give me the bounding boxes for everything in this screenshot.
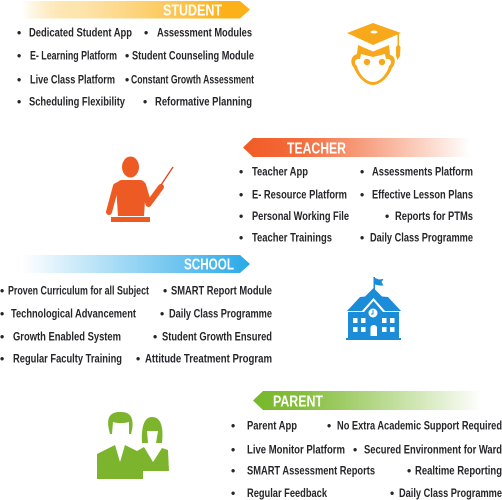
student list: • xyxy=(125,72,129,86)
parent list: Live Monitor Platform xyxy=(247,442,345,456)
parent list xyxy=(231,418,502,500)
parent list: • xyxy=(231,486,235,500)
panel: parent xyxy=(97,391,502,500)
school list: Regular Faculty Training xyxy=(13,352,122,366)
student list: • xyxy=(143,94,147,108)
teacher list: • xyxy=(239,188,243,202)
panel: teacher xyxy=(109,138,473,244)
parent list: Parent App xyxy=(247,418,297,432)
student list: Reformative Planning xyxy=(155,94,252,108)
school banner: SCHOOL xyxy=(184,256,234,274)
student list: • xyxy=(17,94,21,108)
parent list: • xyxy=(231,442,235,456)
student list: Assessment Modules xyxy=(157,26,252,40)
student banner: STUDENT xyxy=(163,2,222,20)
school list: Technological Advancement xyxy=(11,306,136,320)
school list: SMART Report Module xyxy=(171,284,272,298)
student list: Constant Growth Assessment xyxy=(131,72,254,86)
school list: • xyxy=(0,284,4,298)
student list: Scheduling Flexibility xyxy=(29,94,125,108)
school list: • xyxy=(0,352,4,366)
student list xyxy=(17,26,254,108)
student list: Live Class Platform xyxy=(30,72,115,86)
parent list: • xyxy=(231,464,235,478)
student list: Student Counseling Module xyxy=(132,48,254,62)
icon: teacher xyxy=(109,156,173,222)
student list: • xyxy=(17,26,21,40)
teacher list: Teacher App xyxy=(252,164,308,178)
icon: parents xyxy=(97,412,169,479)
teacher list: Daily Class Programme xyxy=(370,230,473,244)
parent list: • xyxy=(231,418,235,432)
school list: • xyxy=(136,352,140,366)
parent banner xyxy=(253,391,482,410)
student banner xyxy=(22,1,250,20)
parent list: • xyxy=(327,418,331,432)
teacher list: Reports for PTMs xyxy=(395,209,473,223)
school banner xyxy=(22,255,250,274)
teacher list: • xyxy=(360,230,364,244)
student list: E- Learning Platform xyxy=(30,48,117,62)
teacher list xyxy=(239,164,473,244)
icon: school xyxy=(346,277,401,340)
teacher list: • xyxy=(239,209,243,223)
parent list: Regular Feedback xyxy=(247,486,327,500)
panel: school xyxy=(0,255,401,366)
teacher list: • xyxy=(239,164,243,178)
school list: Growth Enabled System xyxy=(13,330,121,344)
student list: Dedicated Student App xyxy=(29,26,132,40)
panel: student xyxy=(17,1,401,108)
school list: Student Growth Ensured xyxy=(162,330,272,344)
school list: Proven Curriculum for all Subject xyxy=(8,284,149,298)
teacher list: E- Resource Platform xyxy=(252,188,347,202)
student list: • xyxy=(125,48,129,62)
teacher list: Personal Working File xyxy=(252,209,349,223)
student list: • xyxy=(144,26,148,40)
school list: • xyxy=(0,306,4,320)
teacher list: Assessments Platform xyxy=(372,164,473,178)
parent list: • xyxy=(390,486,394,500)
teacher list: • xyxy=(385,209,389,223)
teacher list: Effective Lesson Plans xyxy=(372,188,473,202)
school list: • xyxy=(153,330,157,344)
school list xyxy=(0,284,272,366)
school list: • xyxy=(160,306,164,320)
student list: • xyxy=(17,48,21,62)
school list: • xyxy=(0,330,4,344)
teacher banner xyxy=(243,138,470,158)
teacher banner: TEACHER xyxy=(287,140,346,158)
teacher list: • xyxy=(360,164,364,178)
teacher list: • xyxy=(239,230,243,244)
school list: • xyxy=(163,284,167,298)
parent list: • xyxy=(353,442,357,456)
parent list: SMART Assessment Reports xyxy=(247,464,375,478)
school list: Attitude Treatment Program xyxy=(145,352,272,366)
student list: • xyxy=(17,72,21,86)
parent banner: PARENT xyxy=(273,394,323,410)
teacher list: Teacher Trainings xyxy=(252,230,332,244)
icon: graduate xyxy=(347,23,401,85)
parent list: • xyxy=(407,464,411,478)
teacher list: • xyxy=(360,188,364,202)
school list: Daily Class Programme xyxy=(169,306,272,320)
